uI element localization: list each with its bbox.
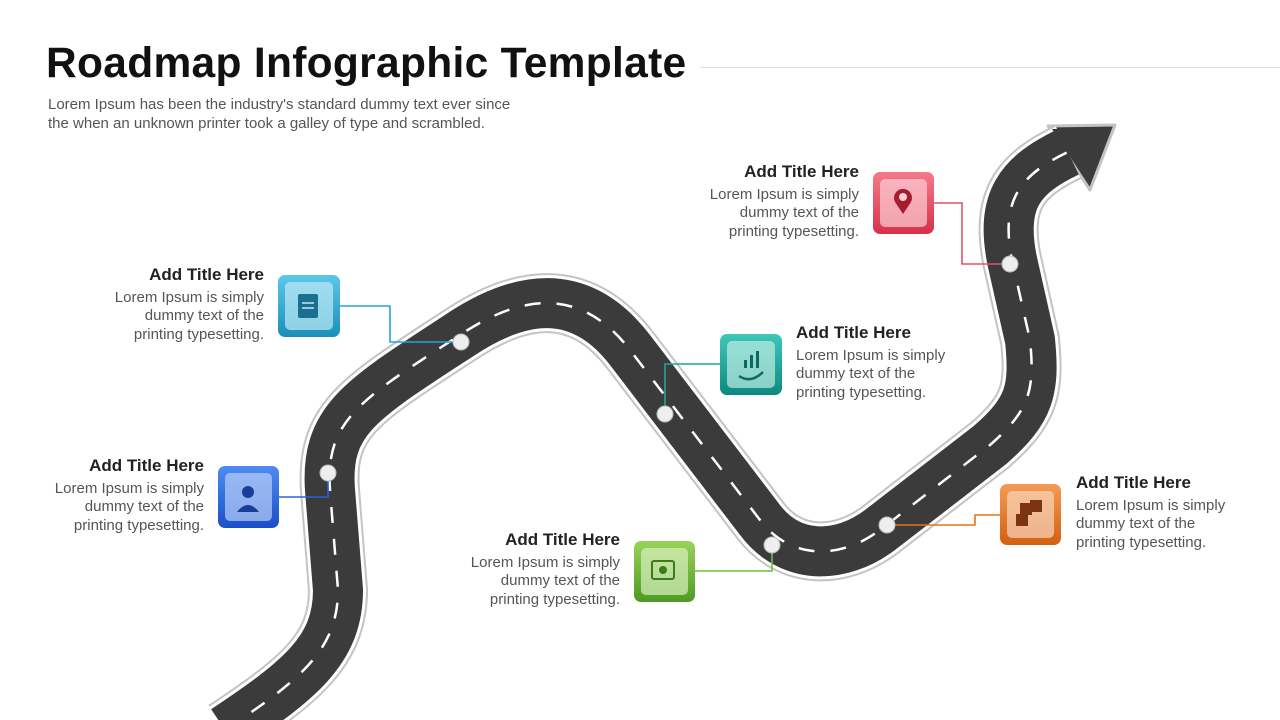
text: step 4: [796, 323, 946, 400]
text: step 1: Add Title Here: [149, 265, 264, 284]
text: step 5: Add Title Here: [744, 162, 859, 181]
text: step 1: [115, 265, 264, 342]
text: step 5: [710, 162, 859, 240]
text: step 1: Lorem Ipsum is simply: [115, 288, 264, 306]
text: step 5: Lorem Ipsum is simply: [710, 186, 859, 202]
text: step 2: dummy text of the: [85, 498, 204, 515]
title: Roadmap Infographic Template: [46, 40, 686, 87]
text: step 3: printing typesetting.: [490, 590, 620, 608]
text: step 6: [1076, 473, 1226, 550]
text: step 1: printing typesetting.: [134, 326, 264, 342]
text: step 3: Add Title Here: [505, 530, 620, 549]
text: step 2: [55, 456, 204, 534]
text: step 6: Lorem Ipsum is simply: [1076, 496, 1225, 514]
icon boxes: [218, 172, 1061, 602]
text: step 1: dummy text of the: [145, 307, 264, 324]
text: step 6: Add Title Here: [1076, 473, 1191, 492]
text: step 4: dummy text of the: [796, 365, 915, 382]
text: step 6: dummy text of the: [1076, 515, 1195, 532]
connectors: [279, 203, 1010, 571]
text: step 5: dummy text of the: [740, 204, 859, 221]
text: step 4: Add Title Here: [796, 323, 911, 342]
text: step 5: printing typesetting.: [729, 222, 859, 240]
text: step 4: printing typesetting.: [796, 384, 926, 400]
text: step 6: printing typesetting.: [1076, 534, 1206, 550]
text: step 3: dummy text of the: [501, 572, 620, 589]
text: step 4: Lorem Ipsum is simply: [796, 346, 945, 364]
text: step 3: [471, 530, 620, 608]
text: step 2: Add Title Here: [89, 456, 204, 475]
text: step 3: Lorem Ipsum is simply: [471, 554, 620, 570]
subtitle: the when an unknown printer took a galley of type and scrambled.: [48, 115, 485, 132]
dots: [320, 256, 1018, 553]
text: step 2: Lorem Ipsum is simply: [55, 480, 204, 496]
subtitle: Lorem Ipsum has been the industry's standard dummy text ever since: [48, 96, 510, 113]
arrow head: [1048, 125, 1115, 190]
subtitle: [48, 96, 510, 132]
text: step 2: printing typesetting.: [74, 516, 204, 534]
